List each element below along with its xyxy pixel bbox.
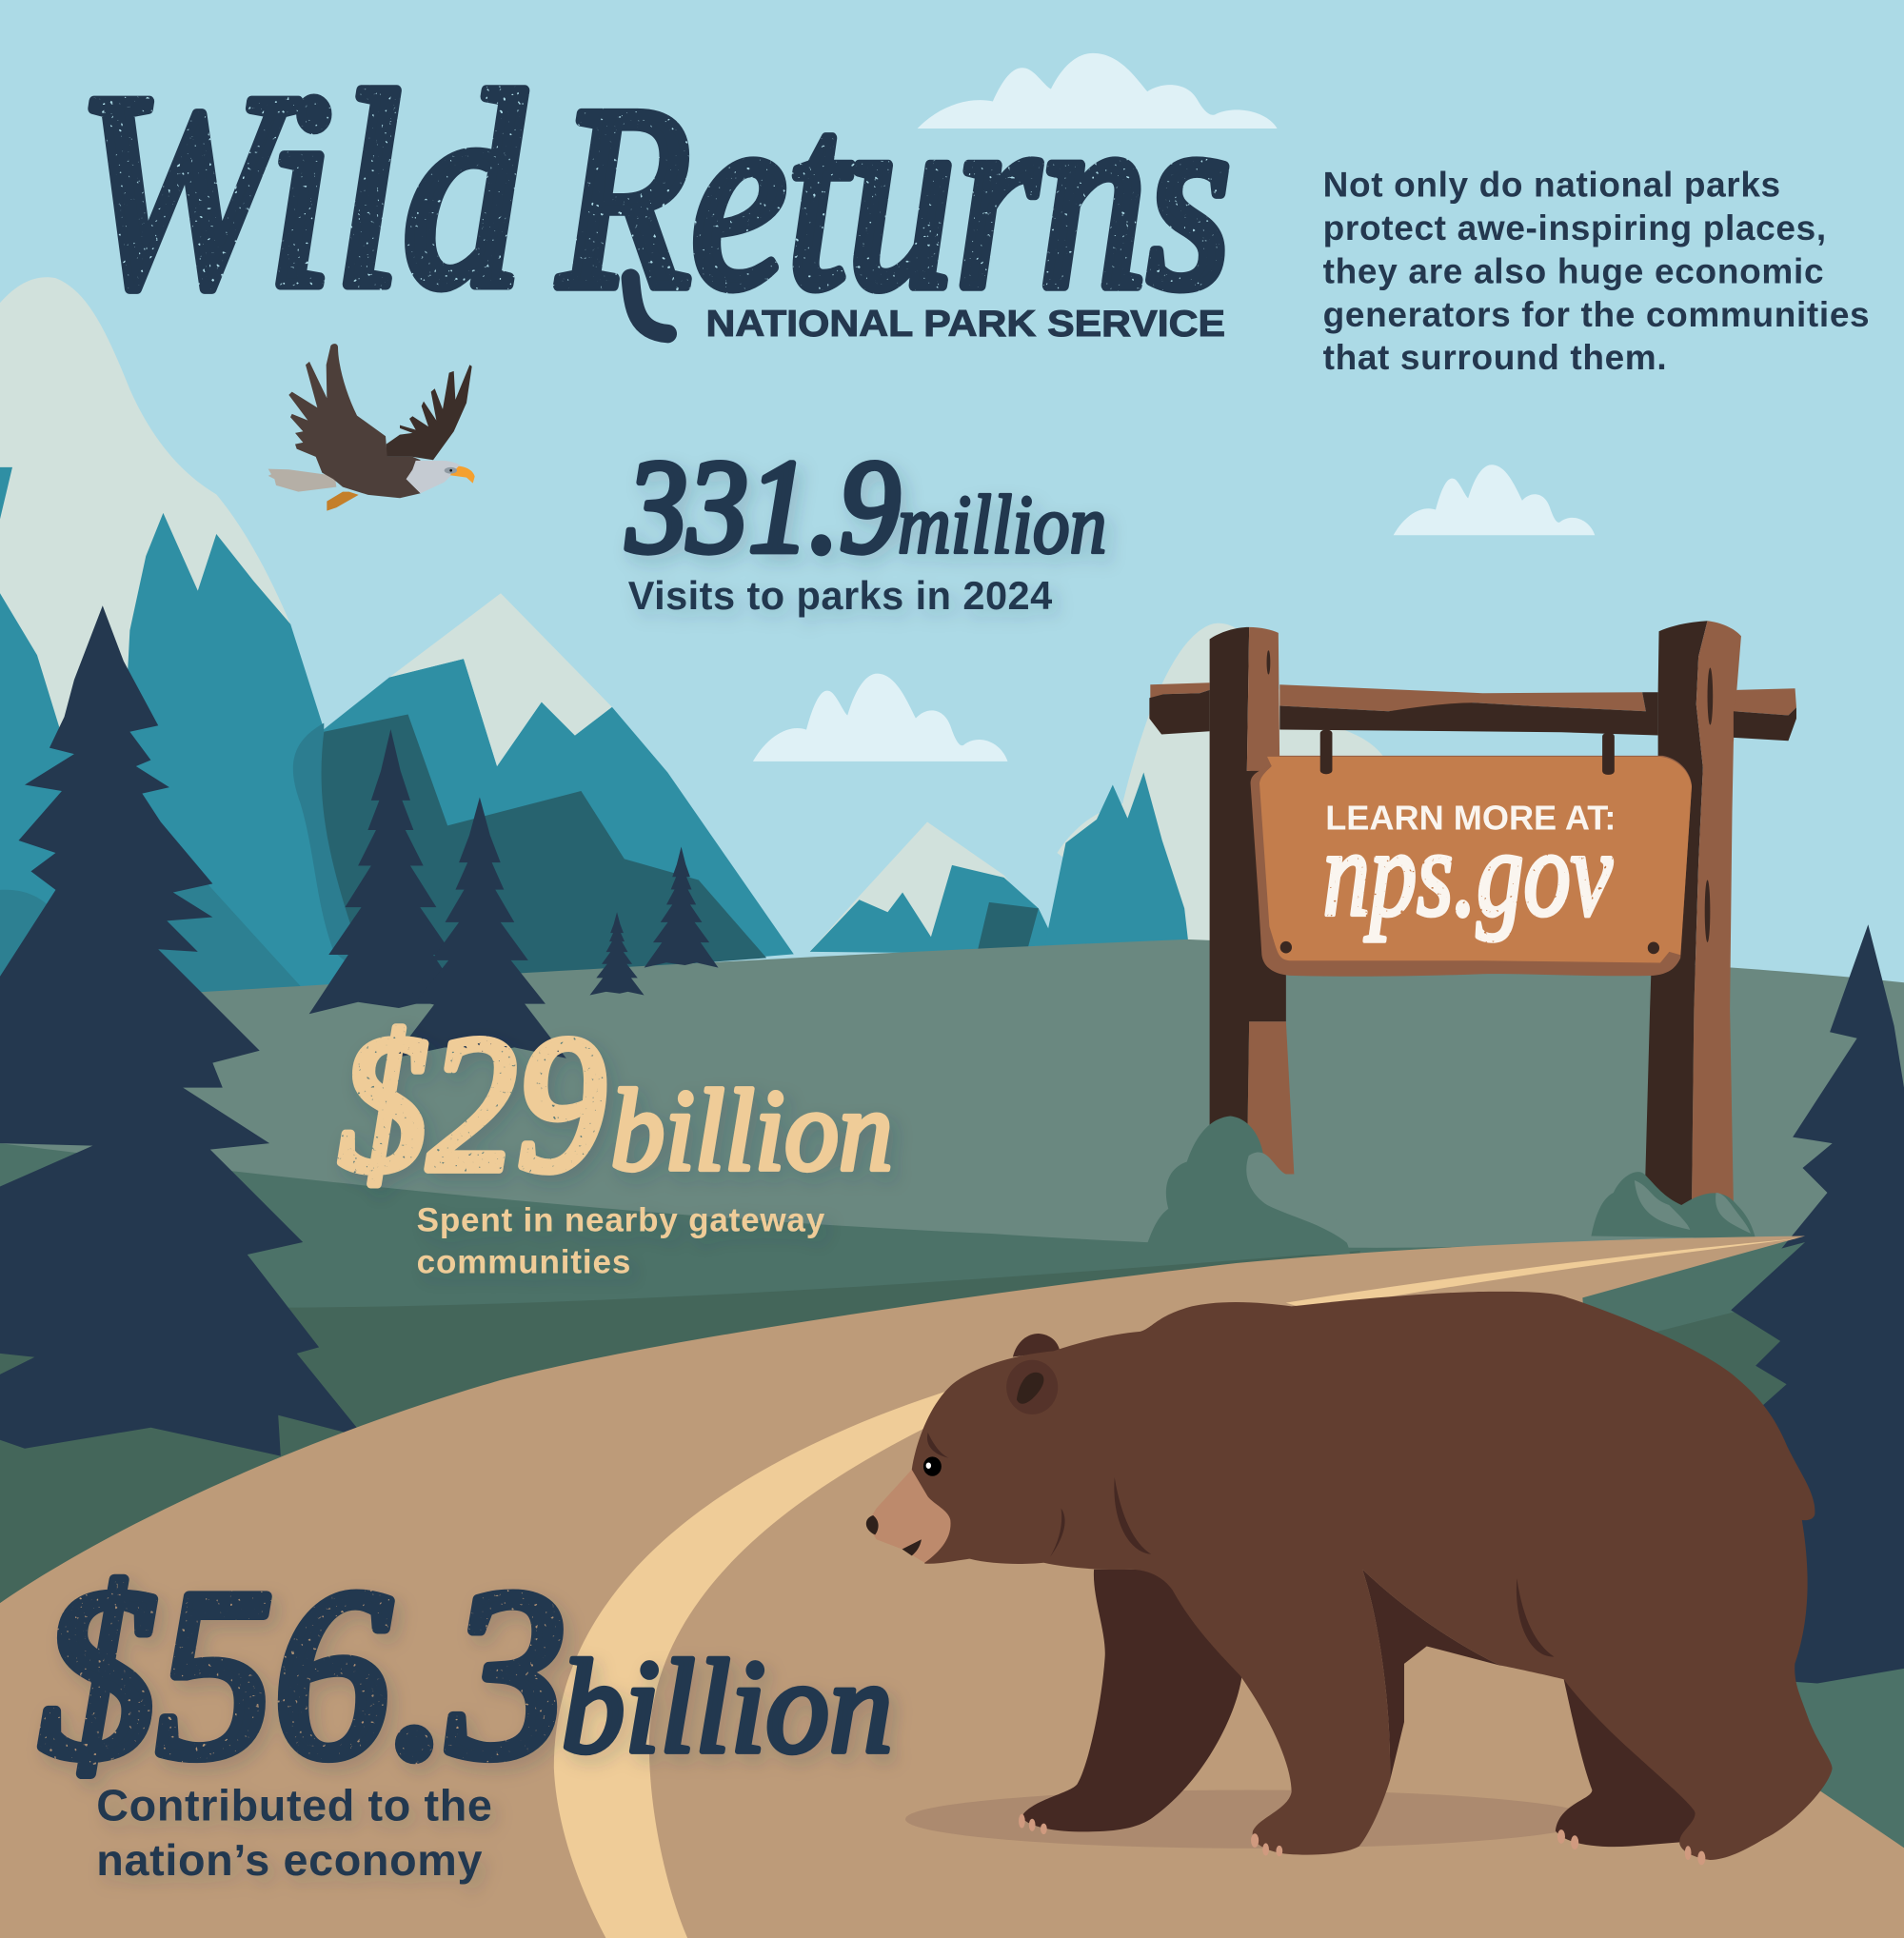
subtitle: NATIONAL PARK SERVICE	[706, 304, 1225, 345]
cloud: right	[1394, 465, 1595, 535]
small teal mountain	[810, 865, 1061, 954]
clouds	[753, 53, 1595, 761]
center dark ridge	[319, 715, 766, 989]
sign nails	[1280, 941, 1659, 954]
road centre line: near	[554, 1382, 977, 1938]
green slope right of road	[1595, 1242, 1805, 1335]
pine tree 4	[589, 912, 645, 996]
center teal mountain	[324, 659, 794, 989]
intro paragraph: generators for the communities	[1323, 295, 1870, 334]
intro paragraph: Not only do national parks	[1323, 165, 1780, 204]
center mid ridge	[293, 723, 371, 982]
intro paragraph: they are also huge economic	[1323, 251, 1824, 290]
title: Wild: Wild	[77, 36, 528, 346]
rolling hill: dark green	[0, 1251, 1360, 1631]
stat: economy	[40, 1540, 893, 1885]
sign url: nps.gov	[1323, 805, 1613, 942]
left snow mountain	[0, 277, 290, 754]
bear fur folds	[927, 1433, 1555, 1657]
bear body	[912, 1292, 1833, 1860]
bush: left	[1143, 1117, 1350, 1255]
small dark ridge	[977, 902, 1039, 954]
bear mouth	[902, 1539, 922, 1555]
title flourish: R tail	[630, 278, 667, 334]
sign hangers	[1320, 730, 1615, 775]
pine tree 2	[393, 798, 566, 1058]
title: Returns: Returns	[555, 52, 1232, 343]
bear muzzle	[866, 1470, 951, 1563]
road	[0, 1236, 1904, 1938]
sign board edge	[1251, 756, 1692, 977]
bear ear back	[1013, 1334, 1060, 1356]
economy caption: nation’s economy	[96, 1835, 482, 1885]
icon: eagle	[268, 344, 475, 511]
intro paragraph: protect awe-inspiring places,	[1323, 208, 1826, 247]
economy number: $56.3	[40, 1540, 566, 1809]
small snow mountain	[810, 821, 1061, 952]
sign heading: LEARN MORE AT:	[1325, 798, 1616, 837]
bush: right	[1591, 1172, 1755, 1238]
center snow cap	[389, 593, 612, 766]
visits caption: Visits to parks in 2024	[628, 573, 1052, 618]
stat: gateway spending	[339, 996, 893, 1280]
intro paragraph	[1323, 165, 1870, 377]
rolling hill: pale	[0, 939, 1904, 1359]
bear nose	[866, 1515, 879, 1534]
spending caption: communities	[417, 1243, 630, 1280]
right post	[1644, 621, 1741, 1205]
wood knots	[1267, 650, 1713, 942]
pine tree 3	[645, 846, 719, 968]
bear claws	[1019, 1814, 1705, 1865]
spending number: $29	[339, 996, 605, 1212]
teal mountain behind sign	[1044, 773, 1189, 952]
sign board face	[1259, 757, 1692, 963]
cloud: middle	[753, 674, 1007, 761]
visits unit: million	[898, 478, 1106, 571]
bear eye	[923, 1456, 942, 1476]
left post	[1210, 627, 1294, 1175]
pine tree 1	[309, 729, 472, 1014]
bear far legs	[1021, 1570, 1752, 1847]
spending unit: billion	[611, 1066, 893, 1195]
wooden sign	[1149, 621, 1796, 1205]
small pine trees	[309, 729, 719, 1058]
bear shadow	[905, 1790, 1594, 1849]
dark green strip right	[1644, 1300, 1805, 1607]
mountains	[0, 277, 1386, 1001]
title	[77, 36, 1232, 346]
spending caption: Spent in nearby gateway	[417, 1201, 825, 1238]
road centre line: far	[1286, 1238, 1799, 1310]
intro paragraph: that surround them.	[1323, 338, 1667, 377]
teal foothill	[0, 825, 303, 1001]
stat: visits	[626, 433, 1106, 618]
rolling hill: mid green	[0, 1143, 1904, 1879]
left teal ridges	[0, 467, 402, 989]
economy unit: billion	[562, 1633, 893, 1781]
crossbeam	[1149, 682, 1796, 741]
icon: bear	[866, 1292, 1833, 1865]
economy caption: Contributed to the	[96, 1781, 492, 1830]
bear ear	[1006, 1360, 1058, 1414]
big pine tree right	[1731, 924, 1904, 1684]
visits number: 331.9	[626, 433, 900, 581]
cloud: top	[918, 53, 1278, 129]
snow mountain behind sign	[1057, 623, 1386, 952]
big pine tree left	[0, 605, 365, 1456]
